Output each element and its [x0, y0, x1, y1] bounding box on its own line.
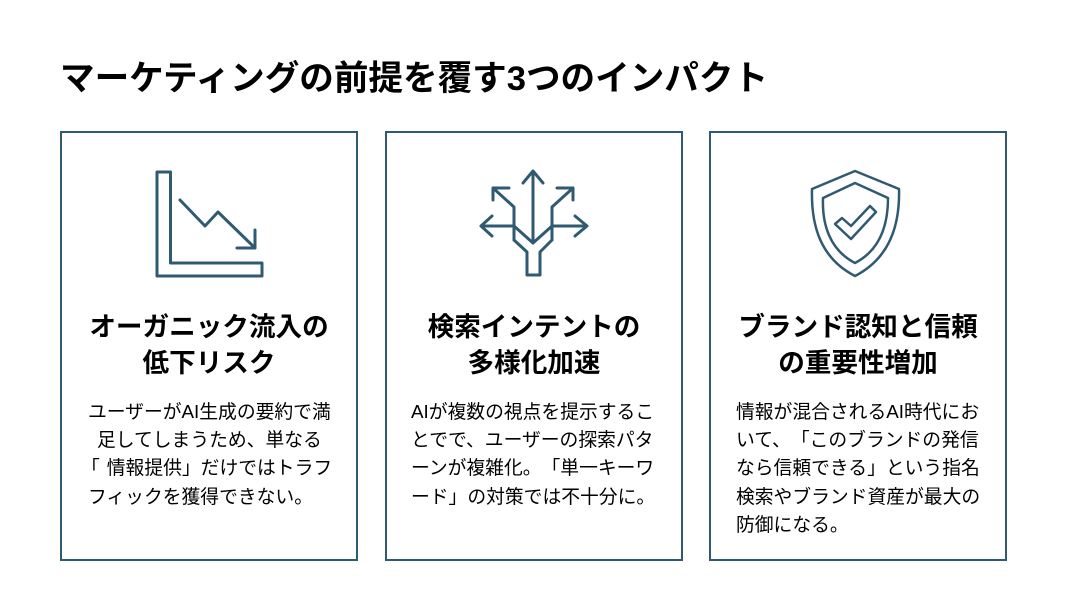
heading: brand: の重要性増加: [778, 348, 938, 378]
icon: declining chart: [156, 170, 264, 278]
text: intent: AIが複数の視点を提示するこ: [411, 401, 654, 422]
heading: organic: 低下リスク: [143, 348, 275, 378]
text: organic: フィックを獲得できない。: [88, 486, 313, 507]
text: brand: 防御になる。: [736, 514, 849, 535]
text: organic: 足してしまうため、単なる: [97, 429, 322, 450]
heading: intent: 検索インテントの: [428, 312, 640, 342]
text: intent: ーンが複雑化。「単一キーワ: [411, 457, 654, 478]
title: マーケティングの前提を覆す3つのインパクト: [60, 60, 768, 98]
text: intent: [411, 401, 655, 507]
heading: brand: [738, 312, 978, 378]
text: brand: いて、「このブランドの発信: [736, 429, 979, 450]
text: intent: とでで、ユーザーの探索パタ: [411, 429, 653, 450]
text: brand: [736, 401, 980, 535]
heading: intent: [428, 312, 640, 378]
text: brand: なら信頼できる」という指名: [736, 457, 980, 478]
panel: organic traffic: [60, 131, 358, 561]
text: brand: 情報が混合されるAI時代にお: [736, 401, 979, 422]
heading: intent: 多様化加速: [468, 348, 600, 378]
heading: organic: [89, 312, 329, 378]
heading: organic: オーガニック流入の: [89, 312, 329, 342]
panel: search intent: [385, 131, 683, 561]
icon: shield with check: [810, 170, 900, 278]
text: organic: [81, 401, 332, 507]
text: organic: 「 情報提供」だけではトラフ: [81, 457, 332, 478]
text: organic: ユーザーがAI生成の要約で満: [88, 401, 331, 422]
icon: branching arrows: [479, 169, 589, 276]
text: intent: ード」の対策では不十分に。: [411, 486, 655, 507]
heading: brand: ブランド認知と信頼: [738, 312, 978, 342]
panel: brand trust: [709, 131, 1007, 561]
text: brand: 検索やブランド資産が最大の: [736, 486, 980, 507]
